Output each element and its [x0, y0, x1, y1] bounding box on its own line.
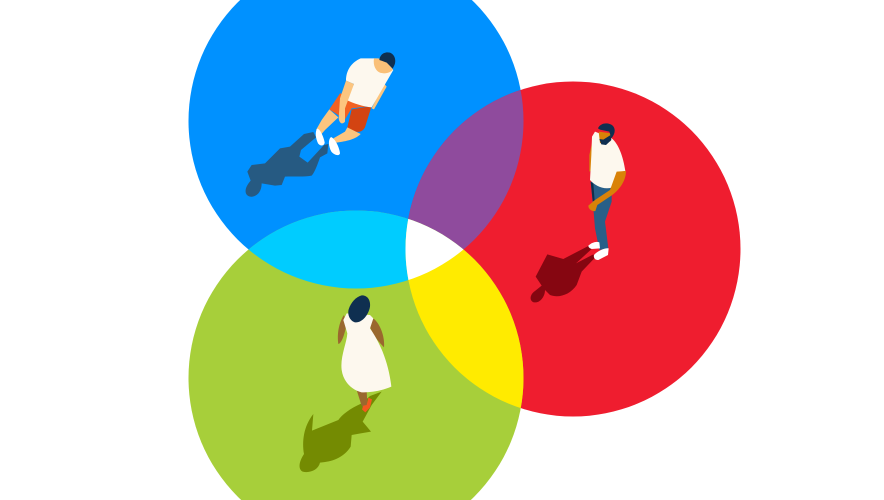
legs — [357, 390, 367, 409]
shadow: green person — [300, 392, 382, 472]
shirt — [590, 132, 625, 188]
person in blue circle — [246, 52, 395, 197]
shirt — [346, 58, 393, 107]
dress — [341, 313, 391, 392]
sandal — [362, 398, 372, 412]
shoes — [588, 242, 600, 249]
legs — [316, 109, 338, 135]
near arm — [339, 81, 354, 123]
overlap: blue and green (cyan) — [248, 210, 464, 288]
hair — [379, 52, 395, 69]
red circle — [406, 82, 740, 416]
blue circle — [188, 0, 524, 288]
beard — [599, 135, 611, 145]
person in green circle — [300, 295, 391, 472]
shoes — [316, 129, 325, 145]
arms — [338, 315, 347, 344]
overlap: blue and red (purple) — [408, 90, 524, 250]
shadow: blue person — [246, 132, 328, 197]
far arm — [372, 83, 387, 109]
right arm — [588, 171, 626, 211]
overlap: all three (white) — [406, 219, 464, 280]
jeans — [591, 182, 612, 250]
head — [374, 58, 393, 73]
hair — [598, 123, 615, 138]
face — [599, 132, 612, 144]
hair — [348, 295, 370, 322]
person in red circle — [531, 123, 626, 302]
shadow: red person — [531, 246, 595, 302]
venn diagram with three people — [188, 0, 740, 500]
green circle — [188, 210, 524, 500]
overlap: red and green (yellow) — [406, 218, 524, 408]
shorts — [329, 93, 372, 119]
left arm — [589, 140, 595, 172]
